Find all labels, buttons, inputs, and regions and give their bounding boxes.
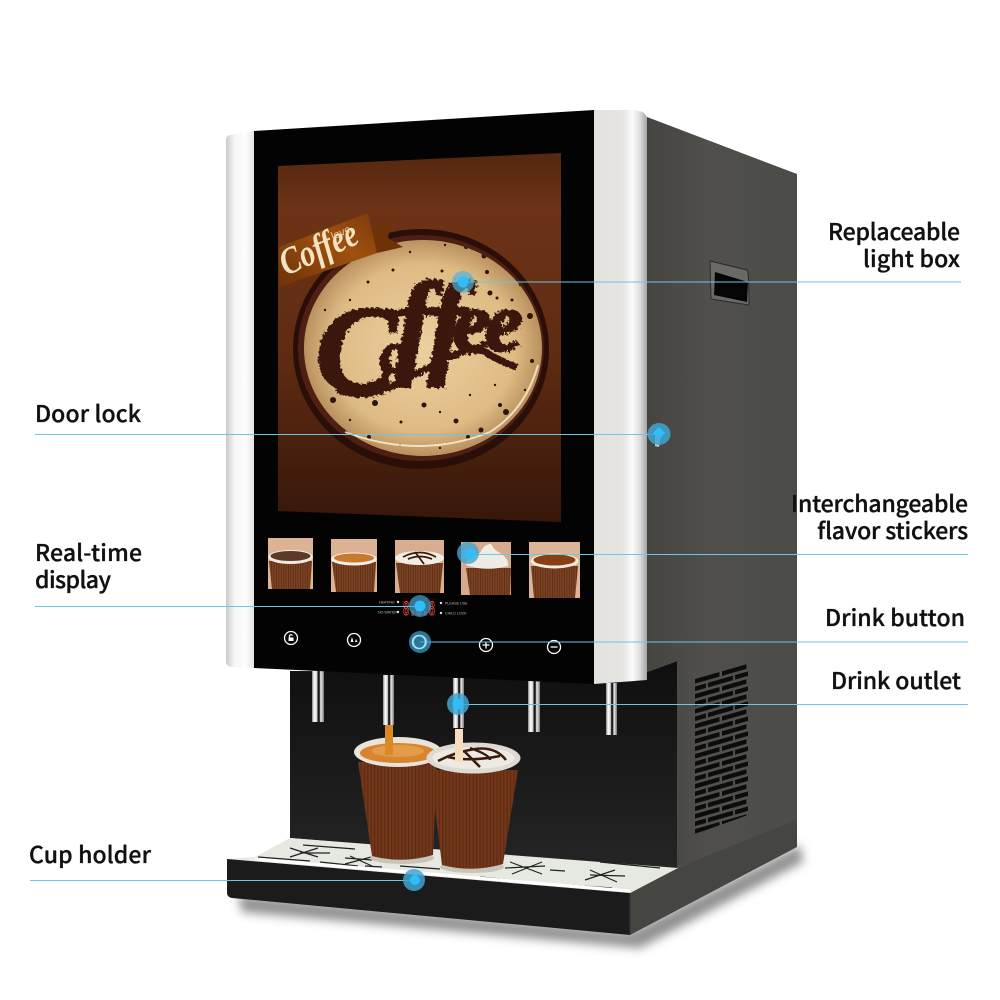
callout: interchangeable flavor stickers: Interchangeable [791,485,968,519]
callout: real-time display: Real-time [35,534,142,568]
foam [304,240,542,456]
machine shadow [238,845,803,948]
right white column [594,110,647,684]
status labels: CHILD LOCK [445,612,467,616]
callout: replaceable light box: Replaceable [828,213,960,247]
sticker 3 [395,540,444,593]
button lock [284,632,298,644]
flavor stickers [268,538,580,598]
button plus [480,638,492,652]
sticker 4 [461,542,511,595]
cream stream [455,729,463,762]
coffee cup rim [293,229,549,469]
latte art word [316,260,522,417]
touch buttons [284,632,560,654]
callout: cup holder: Cup holder [29,836,152,870]
callout: drink outlet: Drink outlet [831,662,961,696]
callout: real-time display: display [35,561,111,595]
callout: interchangeable flavor stickers: flavor stickers [817,512,968,546]
LED display: 8.8.8 [403,599,435,622]
callout: drink outlet [447,662,968,715]
callout: door lock: Door lock [35,395,141,429]
status labels: PLEASE USE [445,602,468,606]
callout: replaceable light box: light box [863,240,960,274]
door lock [655,436,661,447]
base side [630,820,797,935]
latte art word: e [485,276,522,369]
callout: drink button: Drink button [825,599,965,633]
foam bubbles [302,244,534,449]
latte art word: f [428,260,476,387]
callout: real-time display [35,534,431,617]
button minus [548,640,560,654]
right cup [426,729,520,873]
button water [348,634,360,646]
callout: cup holder [29,836,425,891]
ventilation grille [695,663,748,834]
chocolate drizzle [438,748,506,767]
black front panel [254,110,594,684]
tray right corner [629,893,631,935]
latte art word: e [453,276,490,369]
status labels [378,600,468,616]
light box screen [273,153,561,522]
side panel [647,117,797,868]
nozzles [312,671,617,735]
LED display [378,598,468,622]
ribbon banner: Coffee [273,212,365,284]
foam highlight [345,365,538,446]
tray front lip highlight [255,859,630,891]
callout: door lock [35,395,670,445]
status labels: NO WATER [378,610,397,614]
latte art word: f [395,260,443,387]
left white column [226,131,254,668]
sticker 1 [268,538,313,589]
latte art word: o [380,320,409,385]
side handle [710,261,749,305]
recess back wall [290,661,677,870]
coffee stream orange [385,725,393,755]
coffee machine [226,110,797,935]
drip tray top [227,838,678,893]
sticker 2 [331,539,377,592]
drip tray front [227,859,630,935]
latte art word: C [316,282,399,417]
left cup [354,725,442,864]
callout: replaceable light box [452,213,961,293]
sticker 5 [529,542,580,598]
callout: interchangeable flavor stickers [457,485,968,564]
callout: drink button [409,599,968,653]
status labels: HEATING [379,600,395,604]
ribbon banner: love [329,224,353,243]
button power [414,636,426,648]
